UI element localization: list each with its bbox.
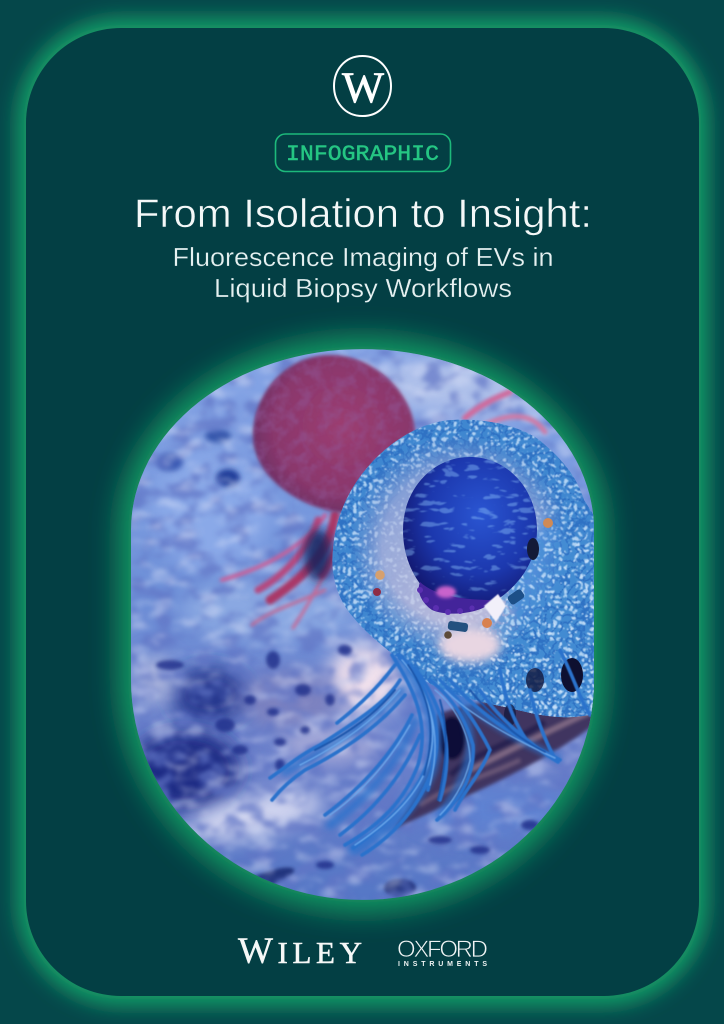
logo: W emblem: W [342, 65, 384, 112]
subtitle: Liquid Biopsy Workflows [214, 273, 512, 303]
badge: INFOGRAPHIC [276, 134, 450, 172]
title: From Isolation to Insight: [134, 192, 592, 236]
logo: Wiley: WILEY [238, 931, 362, 972]
subtitle [172, 242, 554, 303]
image background tissue [130, 349, 594, 900]
title [134, 192, 592, 303]
red cell: blurred background cell [222, 352, 545, 628]
blue cell body [332, 420, 594, 718]
dark wedge under blue cell [396, 701, 592, 829]
image: fluorescence micrograph of cells [130, 349, 620, 900]
purple granules [417, 582, 492, 615]
nucleus [403, 457, 537, 600]
tendrils [270, 650, 590, 855]
badge: INFOGRAPHIC: INFOGRAPHIC [286, 142, 439, 167]
small vesicles [373, 518, 583, 726]
dark mottled spots [156, 645, 539, 869]
logo: W emblem [334, 56, 391, 116]
logo: Oxford Instruments: INSTRUMENTS [398, 961, 487, 968]
image glow [119, 337, 606, 912]
subtitle: Fluorescence Imaging of EVs in [172, 242, 554, 272]
logo: Oxford Instruments: OXFORD [397, 936, 488, 963]
